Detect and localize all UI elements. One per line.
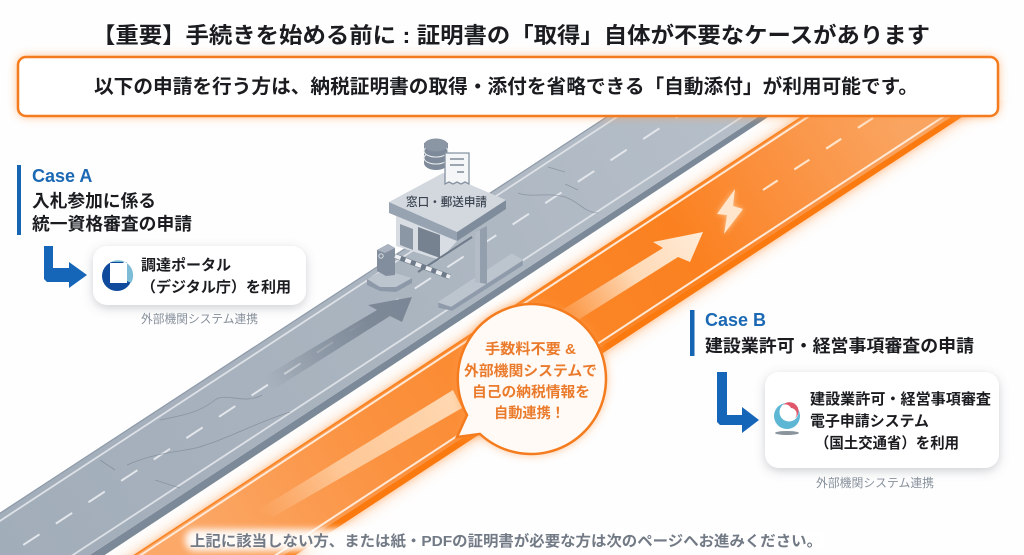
panel: case A: Case A [32,166,92,186]
panel: case A: 入札参加に係る [32,191,156,211]
pillar [475,226,487,284]
speech bubble [457,304,606,454]
card: case B: 電子申請システム [810,413,929,430]
speech bubble: 自己の納税情報を [472,383,590,401]
icon: digital agency logo [102,260,133,291]
orange road arrow [562,232,703,320]
roof [389,202,457,241]
speech bubble: 自動連携！ [494,404,565,422]
speech bubble: 手数料不要 & [485,340,577,358]
panel: case A [17,165,192,235]
callout banner [18,57,998,116]
icon: database and receipt [424,138,469,184]
icon: MLIT logo [774,402,800,435]
caption: case B: 外部機関システム連携 [816,476,934,490]
orange express road [112,90,1003,555]
arrow: case A [44,246,87,288]
booth body [396,216,458,260]
panel: case B [690,310,974,356]
card: case B: （国土交通省）を利用 [815,434,959,452]
panel: case B: 建設業許可・経営事項審査の申請 [705,336,974,356]
callout banner: 以下の申請を行う方は、納税証明書の取得・添付を省略できる「自動添付」が利用可能です。 [94,75,918,98]
right island [439,254,522,310]
gray road arrow [262,297,412,390]
left island [367,270,412,292]
card: case A: （デジタル庁）を利用 [141,278,291,296]
arrow: case B [717,372,759,433]
barrier [395,256,450,277]
speech bubble: 外部機関システムで [464,363,597,380]
title: 【重要】手続きを始める前に : 証明書の「取得」自体が不要なケースがあります [92,23,930,48]
footer note: 上記に該当しない方、または紙・PDFの証明書が必要な方は次のページへお進みください。 [190,532,822,550]
caption: case A: 外部機関システム連携 [141,312,258,326]
card: case A: 調達ポータル [141,257,231,274]
panel: case B: Case B [705,310,766,330]
gate box [377,244,395,276]
card: case A [93,246,306,305]
toll booth [367,173,522,310]
booth label: 窓口・郵送申請 [406,194,487,209]
card: case B: 建設業許可・経営事項審査 [810,390,991,408]
gray road [0,117,768,555]
panel: case A: 統一資格審査の申請 [32,214,192,234]
card: case B [765,372,999,468]
icon: lightning bolt [717,189,743,234]
